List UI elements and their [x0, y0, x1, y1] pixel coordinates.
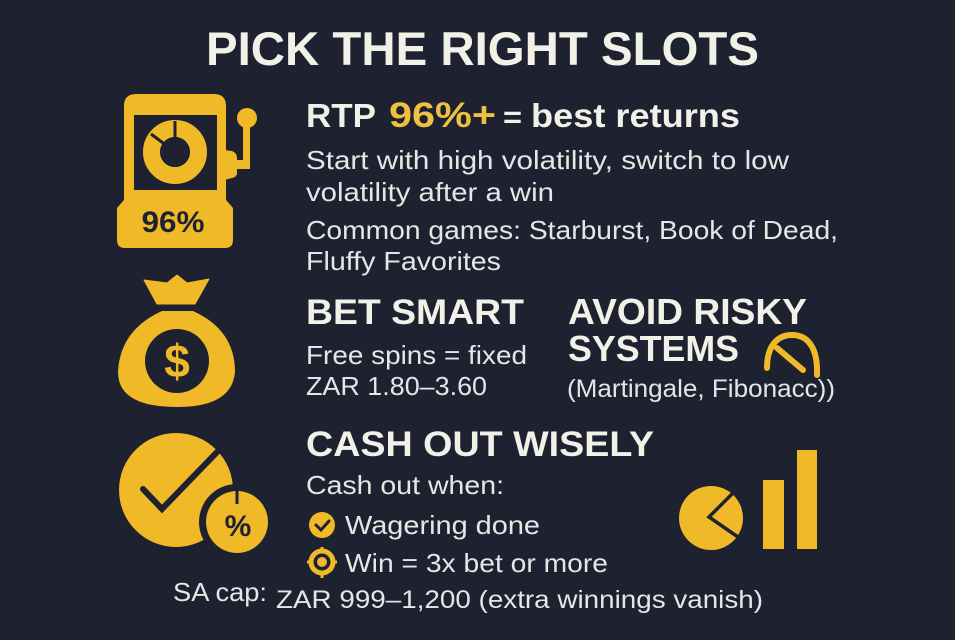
text: common games: Common games: Starburst, Book of Dead, — [306, 215, 838, 245]
heading: bet smart: BET SMART — [306, 293, 524, 332]
icon: target — [307, 547, 337, 578]
text: martingale: (Martingale, Fibonacc)) — [567, 375, 835, 403]
icon: pie and bars — [679, 450, 817, 550]
text: free spins — [306, 340, 527, 401]
text: SA cap — [173, 577, 763, 614]
text: SA cap: SA cap: — [173, 577, 267, 607]
text: SA cap: ZAR 999–1,200 (extra winnings vanish) — [276, 586, 763, 614]
heading: cash out wisely: CASH OUT WISELY — [306, 425, 654, 464]
text: common games: Fluffy Favorites — [306, 246, 501, 276]
text: wagering done: Wagering done — [345, 510, 540, 540]
text: cash out when: Cash out when: — [306, 470, 504, 500]
heading: RTP: RTP — [306, 97, 376, 134]
text: free spins: Free spins = fixed — [306, 340, 527, 370]
heading: avoid risky systems — [568, 291, 807, 369]
text: volatility tip: Start with high volatility, switch to low — [306, 145, 789, 175]
text: volatility tip — [306, 145, 789, 207]
title: PICK THE RIGHT SLOTS — [206, 22, 759, 75]
heading: avoid risky systems: AVOID RISKY — [568, 291, 807, 332]
heading: avoid risky systems: SYSTEMS — [568, 328, 739, 369]
icon: gauge — [767, 335, 817, 375]
icon: slot machine — [117, 94, 257, 248]
icon: check with percent — [119, 433, 275, 560]
heading: RTP: 96%+ — [389, 96, 496, 135]
heading: RTP: = — [503, 101, 522, 134]
text: win 3x bet: Win = 3x bet or more — [345, 548, 608, 578]
icon: slot machine: 96% — [142, 206, 204, 239]
heading: RTP — [306, 96, 740, 135]
text: volatility tip: volatility after a win — [306, 177, 554, 207]
icon: money bag: $ — [164, 335, 190, 387]
icon: check with percent: % — [225, 510, 251, 543]
icon: money bag — [118, 275, 235, 407]
text: common games — [306, 215, 838, 276]
text: free spins: ZAR 1.80–3.60 — [306, 371, 487, 401]
heading: RTP: best returns — [531, 97, 740, 134]
icon: check badge — [309, 512, 335, 538]
